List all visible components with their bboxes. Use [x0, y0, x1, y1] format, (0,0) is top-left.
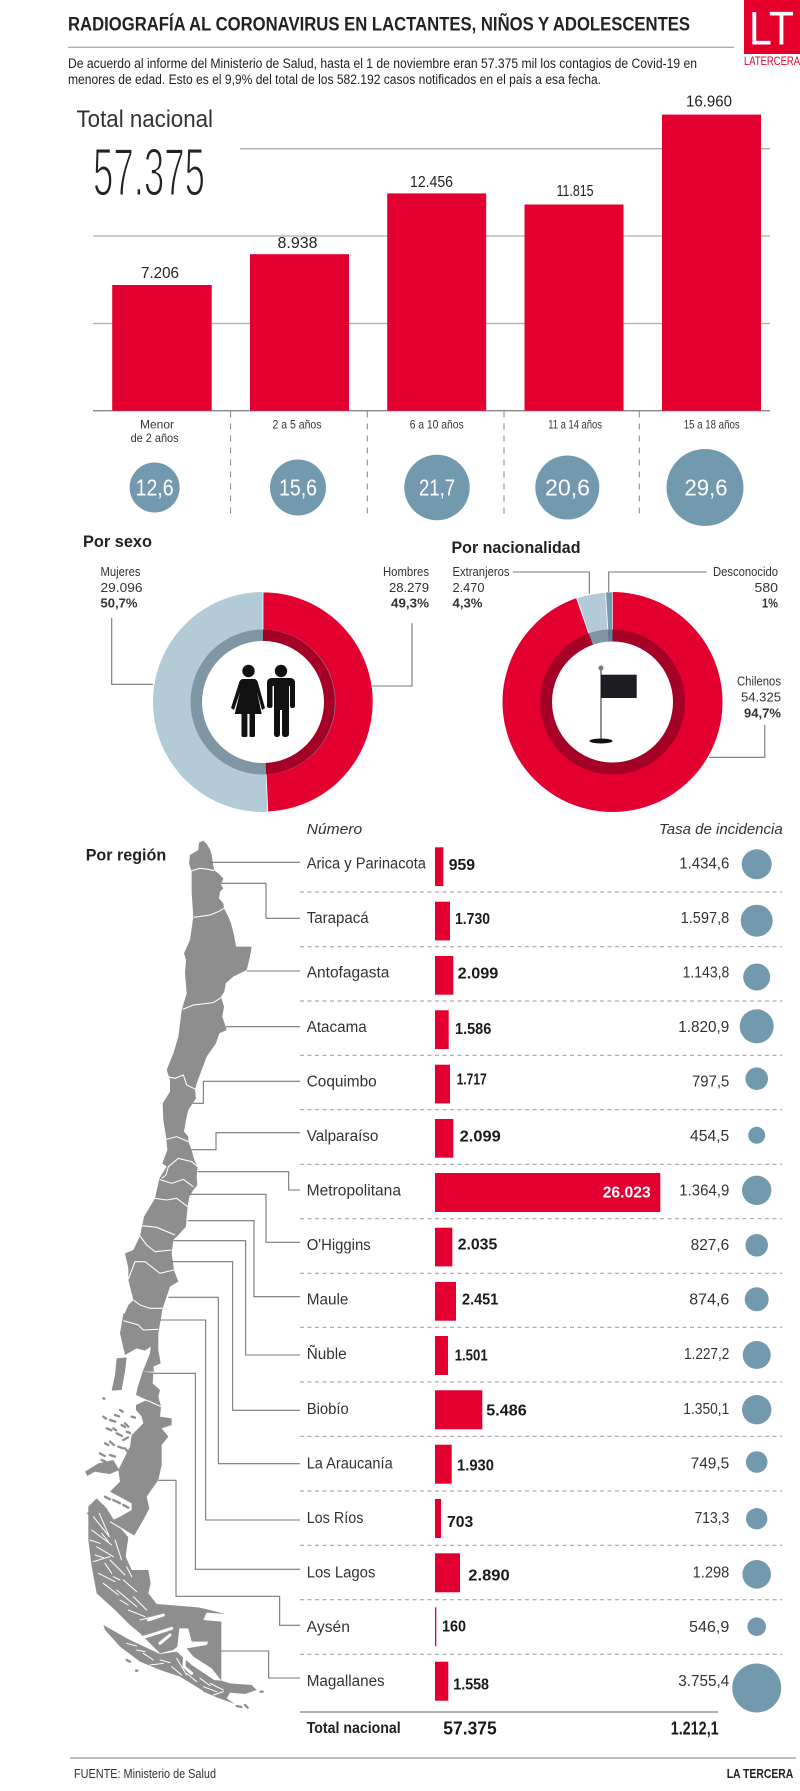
row: Magallanes: [307, 1662, 781, 1712]
row: Metropolitana: 1.364,9: [679, 1183, 729, 1200]
age group labels: 11 a 14 años: [548, 418, 602, 432]
label: Mujeres: Mujeres: [100, 565, 140, 579]
row: Los Lagos: Los Lagos: [307, 1564, 376, 1581]
label: Hombres: [372, 565, 429, 686]
row: Antofagasta: Antofagasta: [307, 964, 390, 981]
row: Los Ríos: Los Ríos: [307, 1510, 364, 1527]
age group labels: de 2 años: [131, 431, 179, 445]
row: Los Lagos: [307, 1553, 771, 1592]
bar chart: cases by age: [93, 94, 770, 411]
total nacional: 57.375: [93, 134, 205, 210]
row: La Araucanía: [307, 1445, 768, 1484]
row: La Araucanía: 1.930: [457, 1457, 494, 1474]
row: Tarapacá: [307, 902, 773, 940]
row: Los Ríos: 713,3: [695, 1510, 729, 1527]
row: Valparaíso: [307, 1119, 765, 1158]
row: Los Ríos: 703: [447, 1514, 473, 1531]
total nacional: [76, 106, 213, 210]
bar chart: cases by age: 7.206: [141, 265, 179, 282]
bar chart: cases by age: 11.815: [556, 183, 594, 200]
row: Atacama: 1.586: [455, 1021, 491, 1038]
age group labels: [131, 418, 740, 445]
row: Arica y Parinacota: Arica y Parinacota: [307, 855, 426, 872]
bar chart: cases by age: 8.938: [278, 235, 318, 252]
label: Chilenos: [709, 675, 781, 757]
row: Magallanes: Magallanes: [307, 1673, 385, 1690]
row: Aysén: 546,9: [689, 1619, 729, 1636]
label: Desconocido: [609, 565, 778, 610]
percentage circles by age: 12,6: [136, 474, 174, 500]
percentage circles by age: 21,7: [419, 474, 455, 500]
label: Extranjeros: 2.470: [452, 581, 485, 595]
row: Los Lagos: 1.298: [693, 1564, 729, 1581]
row: Ñuble: 1.227,2: [684, 1346, 729, 1363]
donut chart: por nacionalidad: [502, 592, 722, 812]
label: Chilenos: 54.325: [741, 691, 781, 705]
age group labels: Menor: [140, 418, 174, 432]
row: Los Lagos: 2.890: [468, 1567, 510, 1584]
row: Maule: [307, 1282, 769, 1321]
row: Total nacional: 57.375: [443, 1719, 497, 1739]
label: Desconocido: 580: [754, 581, 778, 595]
label: Desconocido: Desconocido: [713, 565, 778, 579]
percentage circles by age: [130, 449, 744, 526]
leader lines from map to region names: [153, 862, 300, 1678]
percentage circles by age: 29,6: [684, 474, 728, 500]
row: Total nacional: [300, 1712, 719, 1739]
column header: Tasa de incidencia: Tasa de incidencia: [659, 821, 783, 838]
row: O'Higgins: 2.035: [458, 1236, 497, 1253]
icon: woman and man: [231, 665, 295, 737]
label: Mujeres: 29.096: [100, 581, 143, 595]
row: Metropolitana: 26.023: [603, 1185, 651, 1202]
row: Maule: 2.451: [462, 1291, 498, 1308]
label: Extranjeros: Extranjeros: [452, 565, 510, 579]
row: Arica y Parinacota: 959: [449, 857, 475, 874]
row: Biobío: Biobío: [307, 1401, 349, 1418]
row: Metropolitana: [307, 1173, 771, 1212]
age group labels: 2 a 5 años: [272, 418, 322, 432]
row: Arica y Parinacota: [307, 847, 772, 886]
row: Biobío: 5.486: [486, 1403, 527, 1420]
row: Biobío: [307, 1390, 771, 1429]
row: Arica y Parinacota: 1.434,6: [679, 855, 729, 872]
label: Extranjeros: [452, 565, 589, 610]
heading: por región: Por región: [86, 846, 166, 865]
row: Biobío: 1.350,1: [683, 1401, 729, 1418]
row: Antofagasta: 2.099: [458, 965, 498, 982]
total nacional: Total nacional: [76, 106, 213, 133]
row: Coquimbo: [307, 1065, 768, 1103]
label: Chilenos: 94,7%: [744, 706, 781, 720]
row: La Araucanía: 749,5: [691, 1455, 729, 1472]
source note: FUENTE: Ministerio de Salud: [74, 1767, 216, 1781]
row: Los Ríos: [307, 1499, 767, 1538]
row: O'Higgins: [307, 1228, 768, 1266]
label: Hombres: Hombres: [383, 565, 429, 579]
row: Total nacional: Total nacional: [307, 1720, 401, 1737]
row: Tarapacá: 1.597,8: [681, 910, 729, 927]
title: RADIOGRAFÍA AL CORONAVIRUS EN LACTANTES, NIÑOS Y ADOLESCENTES: [68, 12, 690, 35]
row: Ñuble: Ñuble: [307, 1346, 347, 1363]
heading: por sexo: Por sexo: [83, 533, 152, 551]
age group labels: 15 a 18 años: [684, 418, 740, 432]
row: O'Higgins: 827,6: [691, 1237, 729, 1254]
row: Aysén: 160: [442, 1619, 466, 1636]
intro text: De acuerdo al informe del Ministerio de Salud, hasta el 1 de noviembre eran 57.375 mil los contagios de Covid-19 en: [68, 56, 697, 71]
row: Tarapacá: 1.730: [455, 911, 490, 928]
row: O'Higgins: O'Higgins: [307, 1237, 371, 1254]
label: Hombres: 28.279: [389, 581, 429, 595]
row: Ñuble: [307, 1336, 771, 1375]
row: Coquimbo: 1.717: [457, 1072, 487, 1089]
row: Antofagasta: 1.143,8: [683, 964, 729, 981]
percentage circles by age: 20,6: [545, 474, 590, 500]
icon: flag: [590, 666, 637, 744]
row: Atacama: [307, 1009, 774, 1049]
row: Valparaíso: 454,5: [690, 1128, 729, 1145]
row: Coquimbo: 797,5: [692, 1074, 729, 1090]
row: Maule: Maule: [307, 1292, 348, 1309]
row: Ñuble: 1.501: [455, 1347, 488, 1364]
row: Aysén: [307, 1607, 766, 1646]
row: Tarapacá: Tarapacá: [307, 910, 369, 927]
row: Valparaíso: Valparaíso: [307, 1128, 378, 1145]
percentage circles by age: 15,6: [279, 474, 317, 500]
label: Hombres: 49,3%: [391, 596, 429, 610]
label: Extranjeros: 4,3%: [452, 596, 482, 610]
column header: Número: Número: [307, 821, 362, 838]
row: Magallanes: 3.755,4: [678, 1673, 730, 1690]
row: Aysén: Aysén: [307, 1619, 350, 1636]
label: Chilenos: Chilenos: [737, 675, 781, 689]
row: Maule: 874,6: [689, 1292, 729, 1309]
row: La Araucanía: La Araucanía: [307, 1455, 393, 1472]
intro text: menores de edad. Esto es el 9,9% del total de los 582.192 casos notificados en el país a esa fecha.: [68, 72, 601, 87]
age group separators: [231, 412, 639, 518]
age group labels: 6 a 10 años: [410, 418, 464, 432]
row: Atacama: Atacama: [307, 1019, 367, 1036]
row: Coquimbo: Coquimbo: [307, 1074, 377, 1090]
row: Metropolitana: Metropolitana: [307, 1183, 401, 1200]
row: Total nacional: 1.212,1: [671, 1719, 719, 1739]
row: Atacama: 1.820,9: [678, 1019, 729, 1036]
bar chart: cases by age: 16.960: [686, 94, 732, 110]
heading: por nacionalidad: Por nacionalidad: [452, 539, 580, 557]
row: Valparaíso: 2.099: [460, 1128, 501, 1145]
label: Mujeres: 50,7%: [100, 596, 138, 610]
row separators: [300, 892, 782, 1654]
donut chart: por sexo: [153, 592, 373, 812]
label: Mujeres: [100, 565, 153, 684]
label: Desconocido: 1%: [762, 596, 778, 610]
map of Chile by region: [85, 841, 263, 1708]
logo: La Tercera: LT: [749, 2, 794, 54]
bar chart: cases by age: 12.456: [410, 174, 453, 191]
row: Antofagasta: [307, 956, 770, 995]
intro text: [68, 56, 697, 87]
row: Magallanes: 1.558: [453, 1676, 489, 1693]
